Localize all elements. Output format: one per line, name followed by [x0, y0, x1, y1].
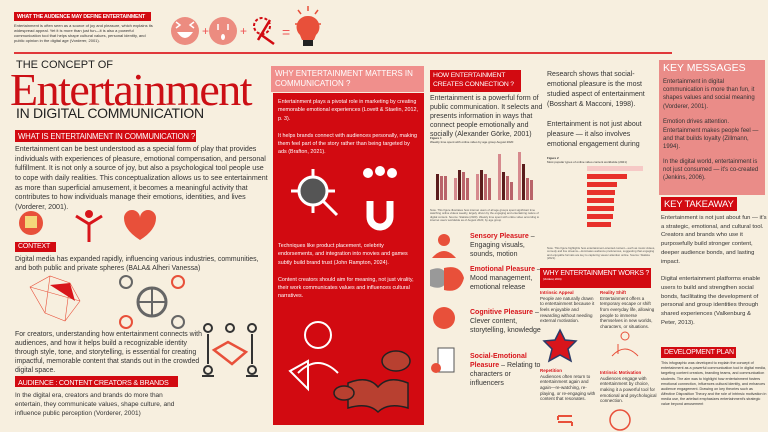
- takeaway text: Entertainment is not just about fun — it's a strategic, emotional, and cultural tool. Creators and brands who use it purposefully build stronger content, deeper audience bonds, and lasting impact.: [661, 215, 767, 265]
- heading: [271, 66, 424, 92]
- takeaway text: Digital entertainment platforms enable users to build and strengthen social bonds, facilitating the development of personal and group identities through shared experiences (Valkenburg & Peter, 2013).: [661, 276, 760, 326]
- pleasure list: Social-Emotional Pleasure – Relating to characters or influencers: [470, 353, 540, 387]
- intro text: Entertainment is often seen as a source of joy and pleasure, which explains its widespread appeal. Yet it is more than just fun—it is also a powerful communication tool that helps shape cultural values, personal identity, and public opinion in the digital age (Vorderer, 2001).: [14, 23, 153, 43]
- equation icons: [171, 6, 321, 46]
- chart: figure 1: Weekly time spent with online video by age group August 2020: [430, 140, 513, 144]
- label: context: [15, 242, 56, 252]
- pleasure list: Emotional Pleasure – Mood management, emotional release: [470, 266, 541, 291]
- equation icons: +: [202, 24, 209, 38]
- development text: This infographic was developed to explain the concept of entertainment as a powerful communication tool in digital media, targeting content creators, branding teams, and communication students. The aim was to highlight how entertainment fosters emotional connection, influences cultural identity, and enhances audience engagement. Drawing on key theories such as Affective Disposition Theory and the role of intrinsic motivation in media use, the artefact emphasizes entertainment's strategic value beyond amusement: [661, 361, 766, 406]
- chart: figure 1: Note. This figure illustrates how internet users of all age groups spent significant time watching online videos weekly, largely driven by the engaging and entertaining nature of digital content. Source: Statista (2020). Weekly time spent with online video according to internet users worldwide as of August 2020, by age group: [430, 208, 539, 222]
- icons row: [19, 210, 156, 242]
- research text: Entertainment is not just about pleasure — it also involves emotional engagement during: [547, 121, 642, 148]
- heading: how entertainment creates connection: [430, 70, 521, 92]
- takeaway text: [661, 215, 767, 326]
- pleasure list: Cognitive Pleasure – Clever content, storytelling, knowledge: [470, 309, 541, 334]
- chart: figure 2: Figure 2: [547, 156, 559, 160]
- label: what is entertainment: WHAT IS ENTERTAINMENT IN COMMUNICATION ?: [18, 132, 195, 141]
- equation icons: +: [240, 24, 247, 38]
- handshake icon: [202, 323, 258, 377]
- chart: figure 2: Most popular types of online video content worldwide (2021): [547, 160, 627, 164]
- heading: how entertainment creates connection: HOW ENTERTAINMENT CREATES CONNECTION ?: [433, 72, 514, 88]
- heading: why entertainment works: (Vorderer, 2001): [543, 277, 561, 281]
- connection text: Entertainment is a powerful form of public communication. It selects and presents information in ways that connect people emotionally and socially (Alexander Görke, 2001): [430, 95, 542, 138]
- research text: Research shows that social-emotional pleasure is the most studied aspect of entertainment (Bosshart & Macconi, 1998).: [547, 71, 645, 108]
- works grid: Entertainment offers a temporary escape or shift from everyday life, allowing people to immerse themselves in new worlds, characters, or situations.: [600, 296, 654, 329]
- red body: Content creators should aim for meaning, not just virality, their work communicates values and influences cultural narratives.: [278, 276, 414, 299]
- context text: Digital media has expanded rapidly, influencing various industries, communities, and both public and private spheres (BALA& Alheri Vanessa): [15, 256, 258, 272]
- audience text: In the digital era, creators and brands do more than entertain, they communicate values, shape culture, and influence public perception (Vorderer, 2001): [15, 392, 174, 417]
- red body: [273, 93, 424, 425]
- label: what the audience may define: WHAT THE AUDIENCE MAY DEFINE ENTERTAINMENT: [17, 14, 145, 20]
- chart: figure 1: Figure 1: [430, 136, 442, 140]
- title: THE CONCEPT OF: [16, 59, 113, 71]
- panel: why entertainment matters: [271, 66, 424, 425]
- network icons: [30, 275, 185, 329]
- red body: It helps brands connect with audiences personally, making them feel part of the story rather than being targeted by ads (Brafton, 2021).: [278, 132, 417, 155]
- works grid: Intrinsic Motivation: [600, 370, 641, 375]
- panel: key messages: Entertainment in digital communication is more than fun, it shapes values and social meaning (Vorderer, 2001).: [663, 79, 755, 110]
- works grid: Reality Shift: [600, 290, 626, 295]
- creators text: For creators, understanding how entertainment connects with audiences, and how it helps build a recognizable identity through style, tone, and storytelling, is essential for creating impactful, memorable content that stands out in the crowded digital space.: [15, 331, 202, 374]
- works grid: Intrinsic Appeal: [540, 290, 574, 295]
- pleasure list: Sensory Pleasure – Engaging visuals, sounds, motion: [470, 233, 535, 258]
- panel: key messages: In the digital world, entertainment is not just consumed — it's co-created (Jenkins, 2006).: [663, 159, 758, 181]
- panel: key messages: Emotion drives attention. Entertainment makes people feel — and that builds loyalty (Zillmann, 1994).: [663, 119, 758, 150]
- label: audience: AUDIENCE : CONTENT CREATORS & BRANDS: [18, 378, 169, 386]
- works grid: [540, 290, 657, 431]
- works grid: Audiences engage with entertainment by choice, making it a powerful tool for emotional and psychological connection.: [600, 376, 657, 403]
- label: context: CONTEXT: [18, 243, 50, 250]
- heading: why entertainment works: WHY ENTERTAINMENT WORKS ?: [543, 270, 649, 277]
- works grid: People are naturally drawn to entertainment because it feels enjoyable and rewarding without needing external motivation.: [540, 296, 594, 323]
- label: what the audience may define: [14, 12, 151, 21]
- works grid: Audiences often return to entertainment again and again—re-watching, re-playing, or re-engaging with content that resonates.: [540, 374, 595, 401]
- chart: figure 2: [547, 156, 655, 260]
- heading: why entertainment works: [540, 268, 651, 288]
- research text: [547, 70, 645, 148]
- chart: figure 1: [430, 136, 540, 222]
- pleasure list: [430, 232, 541, 387]
- red body: Techniques like product placement, celebrity endorsements, and integration into movies and games subtly build brand trust (John Rampton, 2024).: [278, 243, 408, 266]
- red body: Entertainment plays a pivotal role in marketing by creating memorable emotional experiences (Lovett & Staelin, 2012, p. 3).: [278, 99, 418, 122]
- divider: [14, 52, 672, 54]
- equation icons: =: [282, 24, 290, 40]
- works grid: Repetition: [540, 368, 562, 373]
- title: IN DIGITAL COMMUNICATION: [16, 105, 204, 121]
- chart: figure 2: Note. This figure highlights how entertainment-oriented content—such as music videos, comedy and live streams—dominates audience preferences, suggesting that engaging and enjoyable formats are key to capturing viewer attention online. Source: Statista (2021).: [547, 246, 655, 260]
- title: Entertainment: [10, 64, 251, 115]
- panel: key messages: [659, 60, 765, 195]
- panel: key messages: KEY MESSAGES: [663, 62, 746, 74]
- definition text: Entertainment can be best understood as a special form of play that provides individuals with experiences of pleasure, emotional compensation, and personal fulfillment. It is not only a source of joy, but also a psychological tool people use to cope with daily realities. This conceptualization allows us to see entertainment as more than superficial amusement, it becomes a meaningful activity that contributes to how individuals manage their emotions, identities, and lives (Vorderer, 2001).: [15, 145, 268, 211]
- label: development plan: [661, 347, 736, 358]
- label: key takeaway: KEY TAKEAWAY: [664, 198, 734, 210]
- heading: WHY ENTERTAINMENT MATTERS IN COMMUNICATION ?: [275, 69, 413, 88]
- label: development plan: DEVELOPMENT PLAN: [664, 348, 734, 356]
